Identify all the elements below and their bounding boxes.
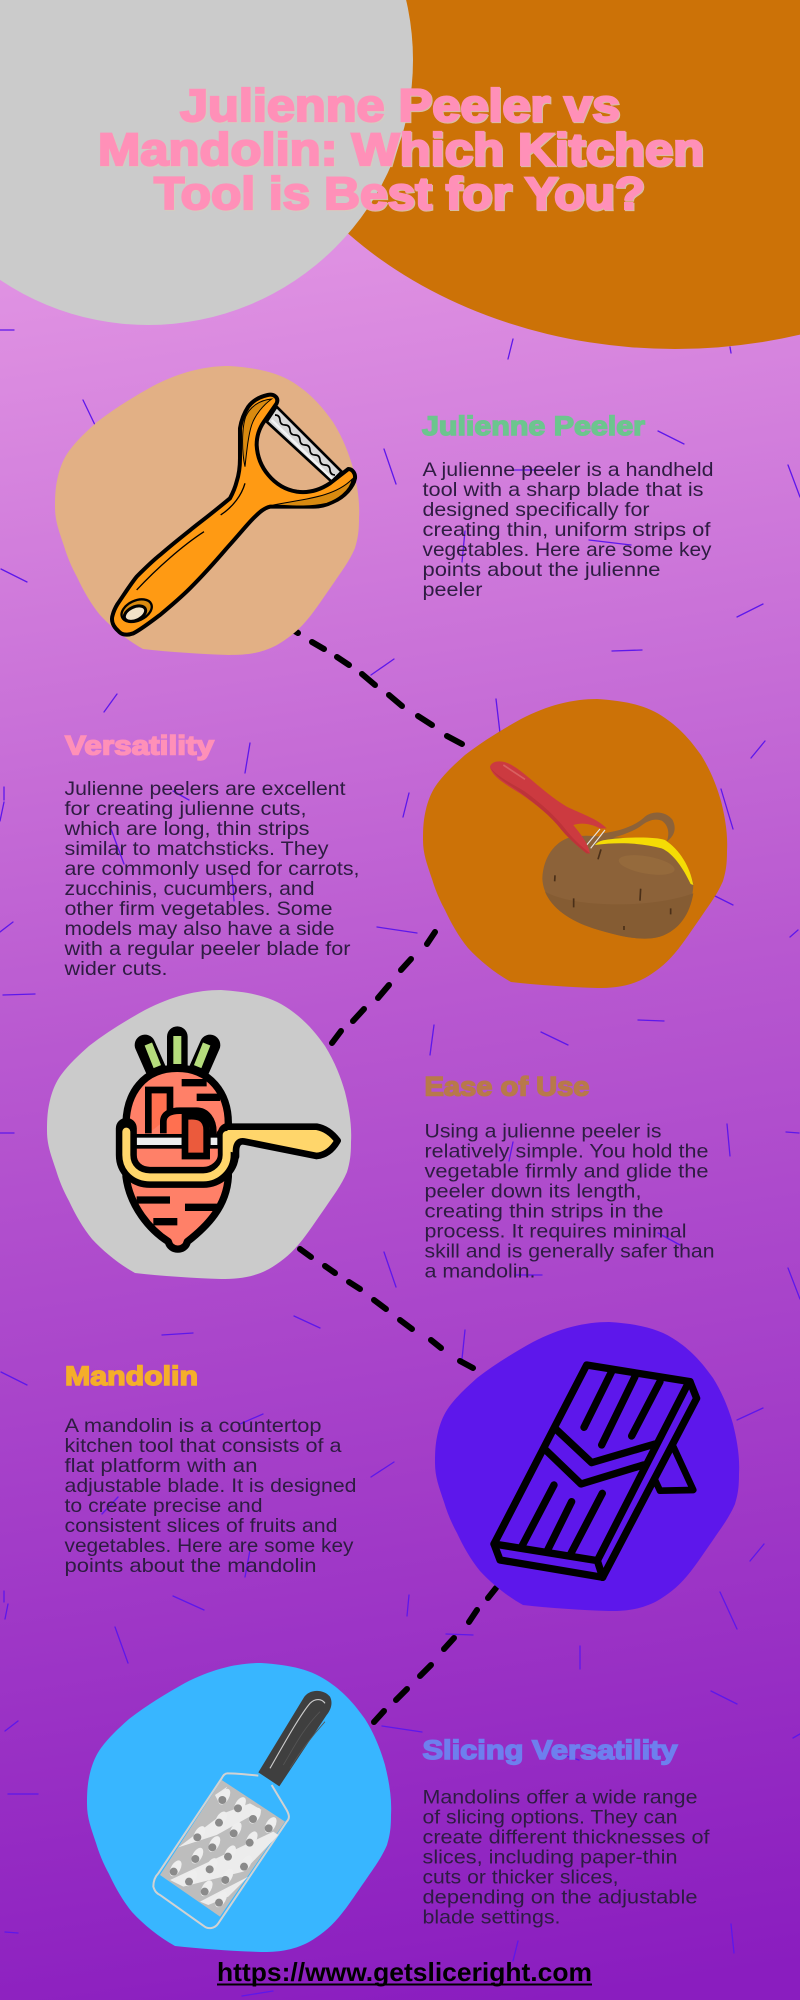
header shape: gray circle bbox=[0, 0, 413, 325]
text: slicing versatility description: cuts or thicker slices, bbox=[422, 1866, 618, 1888]
text: slicing versatility description: depending on the adjustable bbox=[422, 1886, 698, 1908]
text: mandolin description: to create precise and bbox=[64, 1495, 262, 1517]
text: mandolin description: A mandolin is a countertop bbox=[64, 1415, 322, 1437]
text: mandolin description: points about the mandolin bbox=[64, 1555, 316, 1577]
title bbox=[98, 80, 704, 219]
heading: Ease of Use: Ease of Use bbox=[424, 1072, 590, 1102]
heading: Julienne Peeler: Julienne Peeler bbox=[422, 411, 646, 441]
text: versatility description: Julienne peelers are excellent bbox=[64, 778, 346, 800]
dashed connector 3 bbox=[300, 1249, 473, 1368]
text: ease of use description: relatively simple. You hold the bbox=[424, 1140, 708, 1162]
text: versatility description: zucchinis, cucumbers, and bbox=[64, 878, 314, 900]
text: mandolin description: adjustable blade. It is designed bbox=[64, 1475, 356, 1497]
text: slicing versatility description: of slicing options. They can bbox=[422, 1806, 678, 1828]
icon: carrot with peeler bbox=[126, 1036, 338, 1249]
dashed connector 1 bbox=[293, 630, 462, 744]
text: mandolin description: flat platform with an bbox=[64, 1455, 258, 1477]
text: ease of use description: peeler down its length, bbox=[424, 1180, 642, 1202]
blob: violet behind mandolin bbox=[435, 1322, 739, 1611]
text: mandolin description bbox=[64, 1415, 356, 1577]
header shape: orange ellipse bbox=[235, 0, 800, 349]
icon: grater bbox=[153, 1691, 331, 1928]
text: versatility description: which are long, thin strips bbox=[63, 818, 310, 840]
text: versatility description: models may also have a side bbox=[64, 918, 334, 940]
heading: Slicing Versatility: Slicing Versatility bbox=[422, 1735, 678, 1765]
icon: potato with red peeler bbox=[490, 761, 693, 939]
blob: sky blue behind grater bbox=[87, 1663, 391, 1952]
text: versatility description: wider cuts. bbox=[63, 958, 168, 980]
text: versatility description: other firm vegetables. Some bbox=[64, 898, 332, 920]
text: versatility description: with a regular peeler blade for bbox=[63, 938, 351, 960]
text: julienne peeler description: vegetables. Here are some key bbox=[422, 539, 712, 561]
text: mandolin description: consistent slices of fruits and bbox=[64, 1515, 338, 1537]
text: slicing versatility description: slices, including paper-thin bbox=[422, 1846, 678, 1868]
title: Tool is Best for You? bbox=[154, 168, 645, 219]
dashed connector 4 bbox=[374, 1588, 496, 1722]
blob: gray behind carrot bbox=[47, 990, 351, 1279]
text: mandolin description: vegetables. Here are some key bbox=[64, 1535, 354, 1557]
text: ease of use description: creating thin strips in the bbox=[424, 1200, 664, 1222]
text: julienne peeler description: peeler bbox=[422, 579, 483, 601]
text: julienne peeler description: designed specifically for bbox=[422, 499, 650, 521]
text: slicing versatility description: blade settings. bbox=[422, 1906, 560, 1928]
text: ease of use description: vegetable firmly and glide the bbox=[424, 1160, 708, 1182]
heading: Versatility: Versatility bbox=[65, 730, 214, 760]
blob: peach behind peeler bbox=[55, 366, 359, 655]
text: ease of use description: process. It requires minimal bbox=[424, 1220, 686, 1242]
title: Mandolin: Which Kitchen bbox=[98, 124, 704, 175]
text: julienne peeler description: points about the julienne bbox=[422, 559, 660, 581]
text: julienne peeler description bbox=[422, 459, 714, 601]
text: julienne peeler description: creating thin, uniform strips of bbox=[422, 519, 711, 541]
text: julienne peeler description: tool with a sharp blade that is bbox=[422, 479, 704, 501]
text: julienne peeler description: A julienne peeler is a handheld bbox=[422, 459, 714, 481]
text: versatility description: for creating julienne cuts, bbox=[64, 798, 306, 820]
text: slicing versatility description bbox=[422, 1786, 710, 1928]
text: slicing versatility description: Mandolins offer a wide range bbox=[422, 1786, 698, 1808]
text: slicing versatility description: create different thicknesses of bbox=[422, 1826, 710, 1848]
footer link: https://www.getsliceright.com bbox=[217, 1957, 592, 1987]
icon: orange julienne peeler bbox=[112, 395, 355, 635]
title: Julienne Peeler vs bbox=[180, 80, 620, 131]
text: ease of use description: Using a julienne peeler is bbox=[424, 1120, 662, 1142]
text: mandolin description: kitchen tool that consists of a bbox=[64, 1435, 342, 1457]
blob: orange behind potato bbox=[423, 699, 727, 988]
text: versatility description: are commonly used for carrots, bbox=[64, 858, 360, 880]
icon: mandolin slicer bbox=[494, 1365, 697, 1577]
text: versatility description bbox=[63, 778, 359, 980]
text: ease of use description: a mandolin. bbox=[424, 1260, 536, 1282]
text: ease of use description: skill and is generally safer than bbox=[424, 1240, 714, 1262]
text: versatility description: similar to matchsticks. They bbox=[64, 838, 329, 860]
heading: Mandolin: Mandolin bbox=[65, 1361, 198, 1391]
text: ease of use description bbox=[424, 1120, 714, 1282]
dashed connector 2 bbox=[332, 932, 435, 1043]
